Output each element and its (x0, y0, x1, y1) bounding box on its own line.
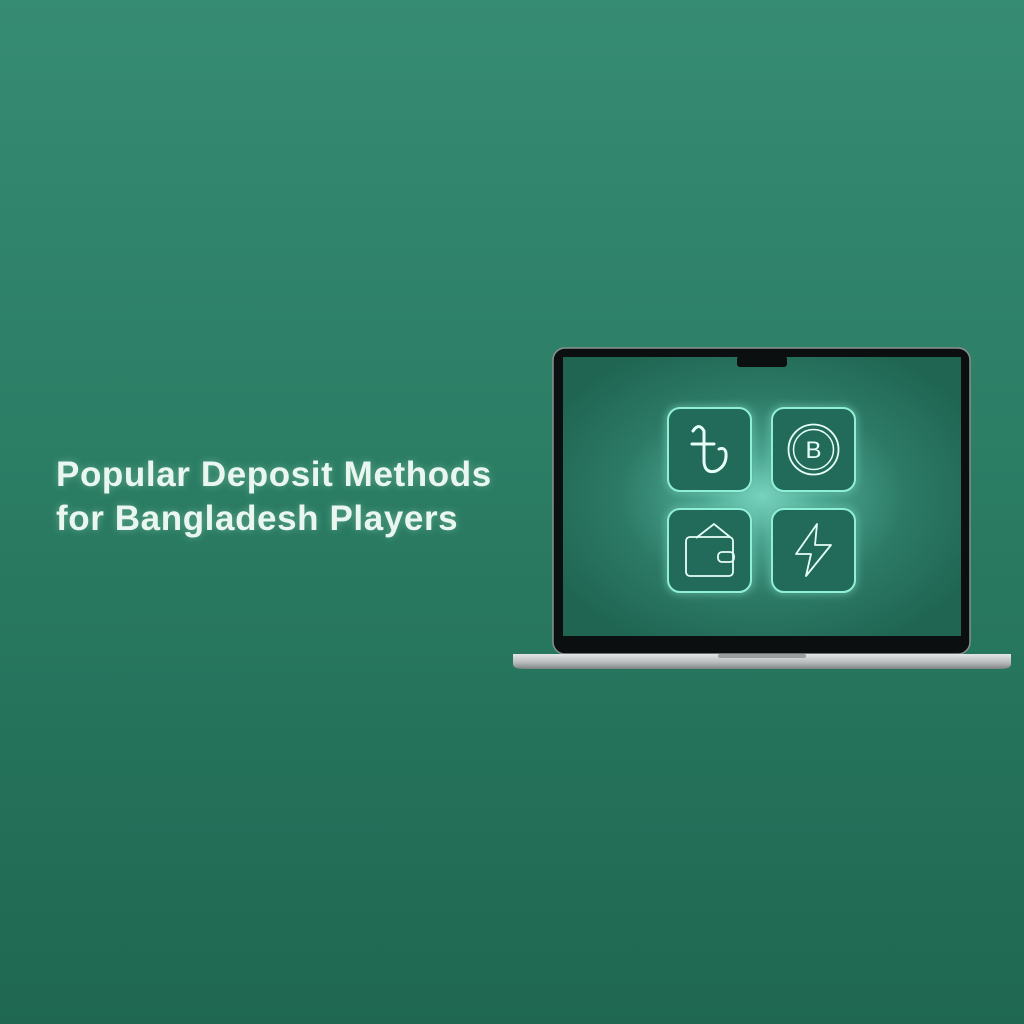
laptop lid (553, 348, 970, 654)
screen (563, 357, 961, 636)
notch (737, 356, 787, 367)
title: Popular Deposit Methods (56, 455, 492, 494)
title (54, 455, 492, 540)
laptop base (513, 654, 1011, 669)
tile: taka (668, 408, 751, 491)
title: for Bangladesh Players (56, 499, 458, 538)
tile: bitcoin: B (805, 437, 822, 464)
tile: wallet (668, 509, 751, 592)
tile: lightning (772, 509, 855, 592)
tile: bitcoin (772, 408, 855, 491)
